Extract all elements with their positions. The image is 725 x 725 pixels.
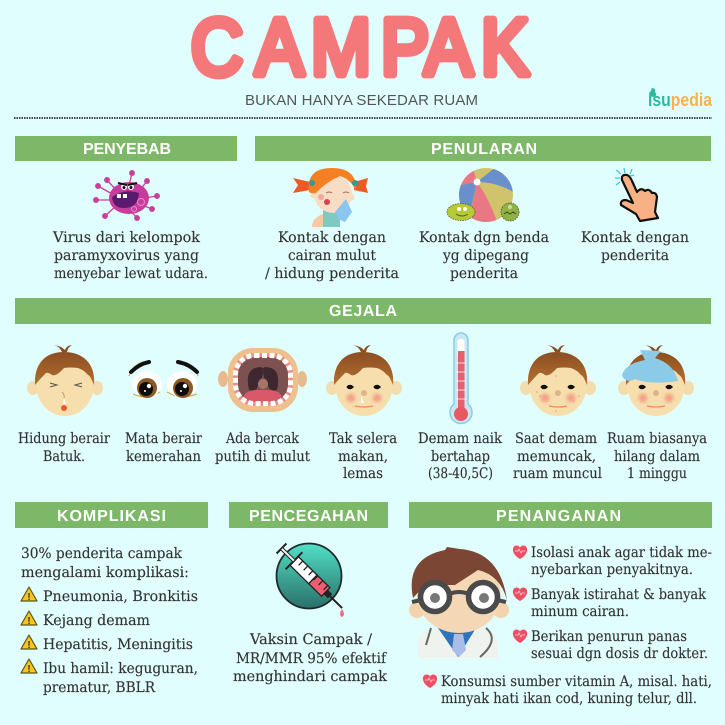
icon: tired face (326, 345, 402, 416)
text: kontak penderita (581, 230, 689, 264)
text: saat demam: ruam muncul (513, 466, 602, 482)
icon: rash face (520, 345, 596, 416)
list: complications: Hepatitis, Meningitis (43, 637, 193, 653)
text: tak selera: Tak selera (329, 431, 397, 447)
heading: penularan (255, 136, 711, 161)
text: penyebab (52, 230, 208, 282)
heading: gejala: GEJALA (329, 303, 397, 320)
list: treatments: sesuai dgn dosis dr dokter. (531, 646, 708, 662)
heading: penyebab (15, 136, 237, 161)
list: complications: ! (27, 616, 31, 627)
text: saat demam: Saat demam (515, 431, 597, 447)
text: ruam hilang: hilang dalam (614, 449, 700, 465)
icon: syringe (273, 540, 351, 617)
text: saat demam: memuncak, (517, 449, 596, 465)
text: vaksin (233, 632, 388, 685)
text: demam: Demam naik (418, 431, 502, 447)
list: complications: Ibu hamil: keguguran, (43, 661, 198, 677)
list: treatments: minum cairan. (531, 604, 629, 620)
text: kontak cairan (265, 230, 399, 282)
text: kontak penderita: Kontak dengan (581, 230, 689, 246)
panel: penanganan (409, 502, 712, 707)
list: treatments: nyebarkan penyakitnya. (531, 562, 693, 578)
text: demam (418, 431, 502, 482)
text: kontak benda: yg dipegang (442, 248, 529, 264)
text: intro: mengalami komplikasi: (21, 565, 189, 581)
text: tak selera: makan, (338, 449, 388, 465)
text: hidung berair: Batuk. (43, 449, 85, 465)
text: hidung berair: Hidung berair (18, 431, 110, 447)
panel: gejala (15, 298, 711, 482)
list: complications: prematur, BBLR (43, 680, 156, 696)
text: demam: bertahap (431, 449, 490, 465)
text: vaksin: Vaksin Campak / (249, 632, 372, 648)
text: penyebab: Virus dari kelompok (52, 230, 200, 246)
text: penyebab: menyebar lewat udara. (54, 266, 208, 282)
panel: penyebab (15, 136, 237, 282)
text: bercak putih (215, 431, 310, 465)
logo: isupedia: isupedia (648, 90, 713, 110)
text: kontak cairan: cairan mulut (288, 248, 376, 264)
icon: pointing hand (615, 168, 658, 221)
heading: pencegahan (229, 502, 388, 528)
text: kontak benda (419, 230, 549, 282)
list: treatments: Berikan penurun panas (531, 629, 687, 645)
text: ruam hilang: 1 minggu (627, 466, 687, 482)
list: complications: ! (27, 664, 31, 675)
text: saat demam (513, 431, 602, 482)
subtitle: BUKAN HANYA SEKEDAR RUAM (245, 92, 478, 109)
text: mata berair: Mata berair (125, 431, 202, 447)
icon: sneezing face (27, 345, 103, 416)
list: treatments: Isolasi anak agar tidak me- (531, 545, 712, 561)
list: complications (21, 587, 198, 696)
icon: doctor (409, 547, 509, 658)
text: kontak cairan: Kontak dengan (278, 230, 386, 246)
icon: open mouth (218, 348, 307, 412)
list: treatments: Banyak istirahat & banyak (531, 587, 706, 603)
text: vaksin: menghindari campak (233, 669, 387, 685)
text: mata berair: kemerahan (126, 449, 201, 465)
icon: face with ice bag (618, 345, 694, 416)
text: mata berair (125, 431, 202, 465)
list: complications: ! (27, 592, 31, 603)
icon: beach ball with germs (447, 165, 519, 225)
icon: thermometer (450, 333, 472, 423)
text: kontak benda: penderita (450, 266, 518, 282)
heading: penyebab: PENYEBAB (83, 141, 171, 158)
icon: girl sneezing (293, 168, 368, 227)
heading: gejala (15, 298, 711, 324)
list: treatments (423, 545, 712, 707)
title: CAMPAK (191, 3, 529, 92)
list: complications: Pneumonia, Bronkitis (43, 589, 198, 605)
list: treatments: minyak hati ikan cod, kuning telur, dll. (441, 691, 697, 707)
text: demam: (38-40,5C) (428, 466, 493, 482)
text: kontak penderita: penderita (601, 248, 669, 264)
heading: komplikasi (15, 502, 208, 528)
text: tak selera (329, 431, 397, 482)
icon: virus (94, 171, 159, 220)
text: hidung berair (18, 431, 110, 465)
list: complications: Kejang demam (43, 613, 150, 629)
heading: penanganan (409, 502, 712, 528)
list: complications: ! (27, 640, 31, 651)
text: intro: 30% penderita campak (21, 546, 182, 562)
text: bercak putih: putih di mulut (215, 449, 310, 465)
text: kontak benda: Kontak dgn benda (419, 230, 549, 246)
text: bercak putih: Ada bercak (225, 431, 299, 447)
panel: komplikasi (15, 502, 208, 696)
text: ruam hilang: Ruam biasanya (607, 431, 707, 447)
heading: pencegahan: PENCEGAHAN (249, 508, 368, 525)
heading: penularan: PENULARAN (431, 141, 537, 158)
text: ruam hilang (607, 431, 707, 482)
text: tak selera: lemas (343, 466, 383, 482)
text: penyebab: paramyxovirus yang (54, 248, 199, 264)
icon: red eyes (129, 362, 198, 398)
text: intro (21, 546, 189, 581)
heading: komplikasi: KOMPLIKASI (57, 508, 166, 525)
panel: pencegahan (229, 502, 388, 685)
panel: penularan (255, 136, 711, 282)
text: vaksin: MR/MMR 95% efektif (236, 651, 388, 667)
heading: penanganan: PENANGANAN (496, 508, 621, 525)
text: kontak cairan: / hidung penderita (265, 266, 399, 282)
